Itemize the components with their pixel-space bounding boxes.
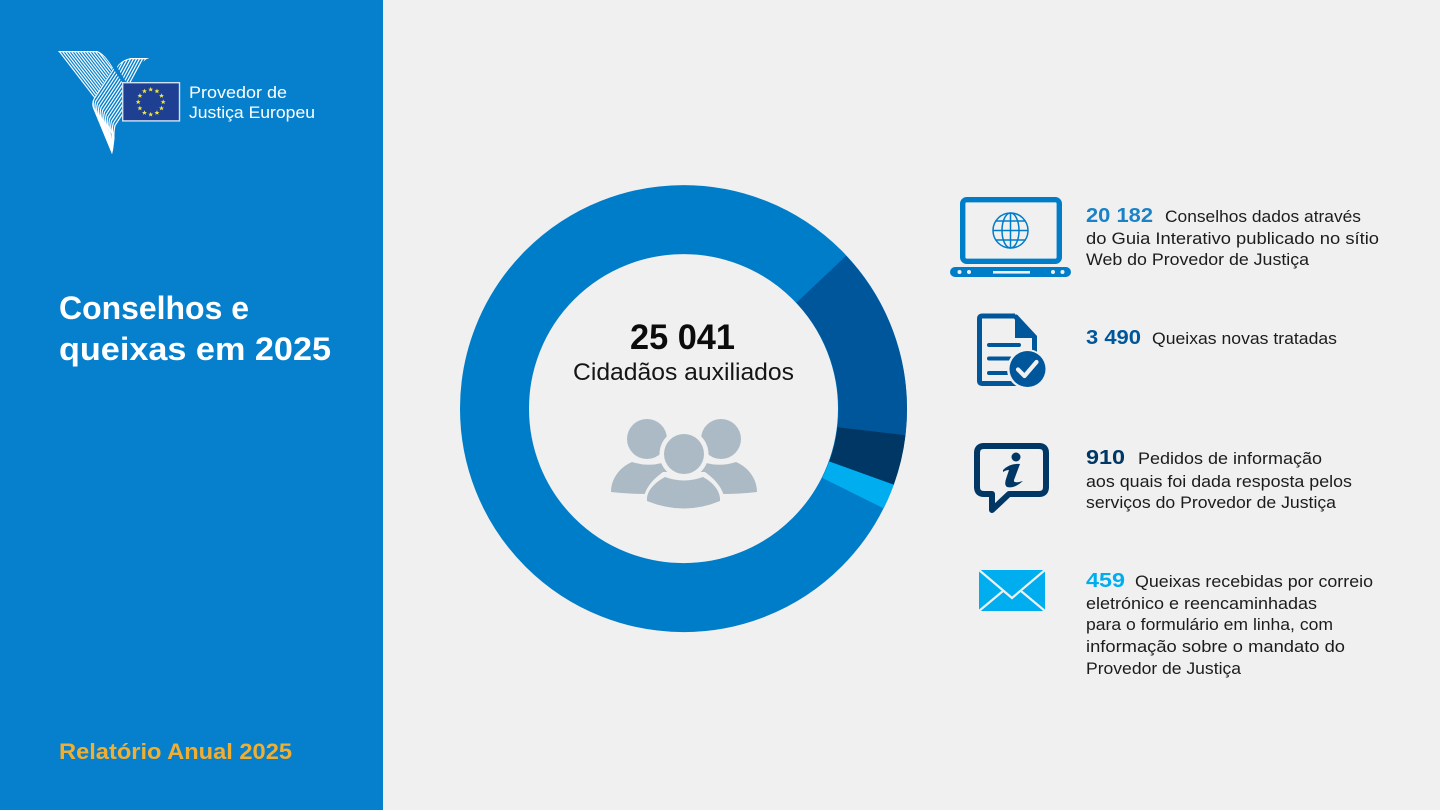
- segment: email complaints: [822, 462, 894, 508]
- segment: information requests: [829, 427, 906, 485]
- icon: EU flag: [123, 83, 180, 121]
- icon: envelope: [979, 570, 1045, 611]
- text: email complaints: 459: [1086, 570, 1125, 592]
- item: email complaints: [979, 570, 1373, 678]
- text: online advice: [1086, 205, 1379, 269]
- logo wordmark: Justiça Europeu: [189, 103, 315, 122]
- icon: laptop with globe: [950, 200, 1071, 277]
- text: information requests: aos quais foi dada resposta pelos: [1086, 472, 1352, 491]
- panel: left sidebar: [0, 0, 383, 810]
- donut centre total: Cidadãos auxiliados: [573, 359, 794, 386]
- segment: new complaints: [796, 256, 907, 435]
- text: online advice: 20 182: [1086, 205, 1153, 227]
- text: information requests: [1086, 447, 1352, 512]
- text: new complaints: Queixas novas tratadas: [1152, 329, 1337, 348]
- icon: information speech bubble: [977, 446, 1046, 510]
- text: email complaints: Provedor de Justiça: [1086, 659, 1242, 678]
- donut centre total: [573, 318, 794, 386]
- icon: document with check: [980, 314, 1047, 389]
- text: information requests: Pedidos de informação: [1138, 449, 1322, 468]
- item: information requests: [977, 446, 1352, 512]
- text: online advice: Conselhos dados através: [1165, 207, 1361, 226]
- text: online advice: Web do Provedor de Justiça: [1086, 250, 1310, 269]
- text: information requests: serviços do Provedor de Justiça: [1086, 493, 1337, 512]
- donut chart: [494, 220, 907, 598]
- item: online advice: [950, 200, 1379, 277]
- donut centre total: 25 041: [630, 318, 735, 357]
- text: new complaints: 3 490: [1086, 327, 1141, 349]
- footer: annual report label: Relatório Anual 2025: [59, 739, 292, 764]
- text: new complaints: [1086, 327, 1337, 349]
- title: Conselhos e: [59, 290, 249, 326]
- text: email complaints: Queixas recebidas por correio: [1135, 572, 1373, 591]
- text: email complaints: eletrónico e reencaminhadas: [1086, 594, 1317, 613]
- title: [59, 290, 331, 367]
- text: information requests: 910: [1086, 447, 1125, 469]
- text: email complaints: informação sobre o mandato do: [1086, 637, 1345, 656]
- text: online advice: do Guia Interativo publicado no sítio: [1086, 229, 1379, 248]
- text: email complaints: [1086, 570, 1373, 678]
- item: new complaints: [980, 314, 1337, 389]
- text: email complaints: para o formulário em linha, com: [1086, 615, 1333, 634]
- icon: group of people: [611, 419, 757, 509]
- icon: logo wings: [56, 51, 149, 154]
- logo wordmark: [189, 83, 315, 122]
- logo: European Ombudsman: [56, 51, 315, 154]
- logo wordmark: Provedor de: [189, 83, 287, 102]
- title: queixas em 2025: [59, 331, 331, 367]
